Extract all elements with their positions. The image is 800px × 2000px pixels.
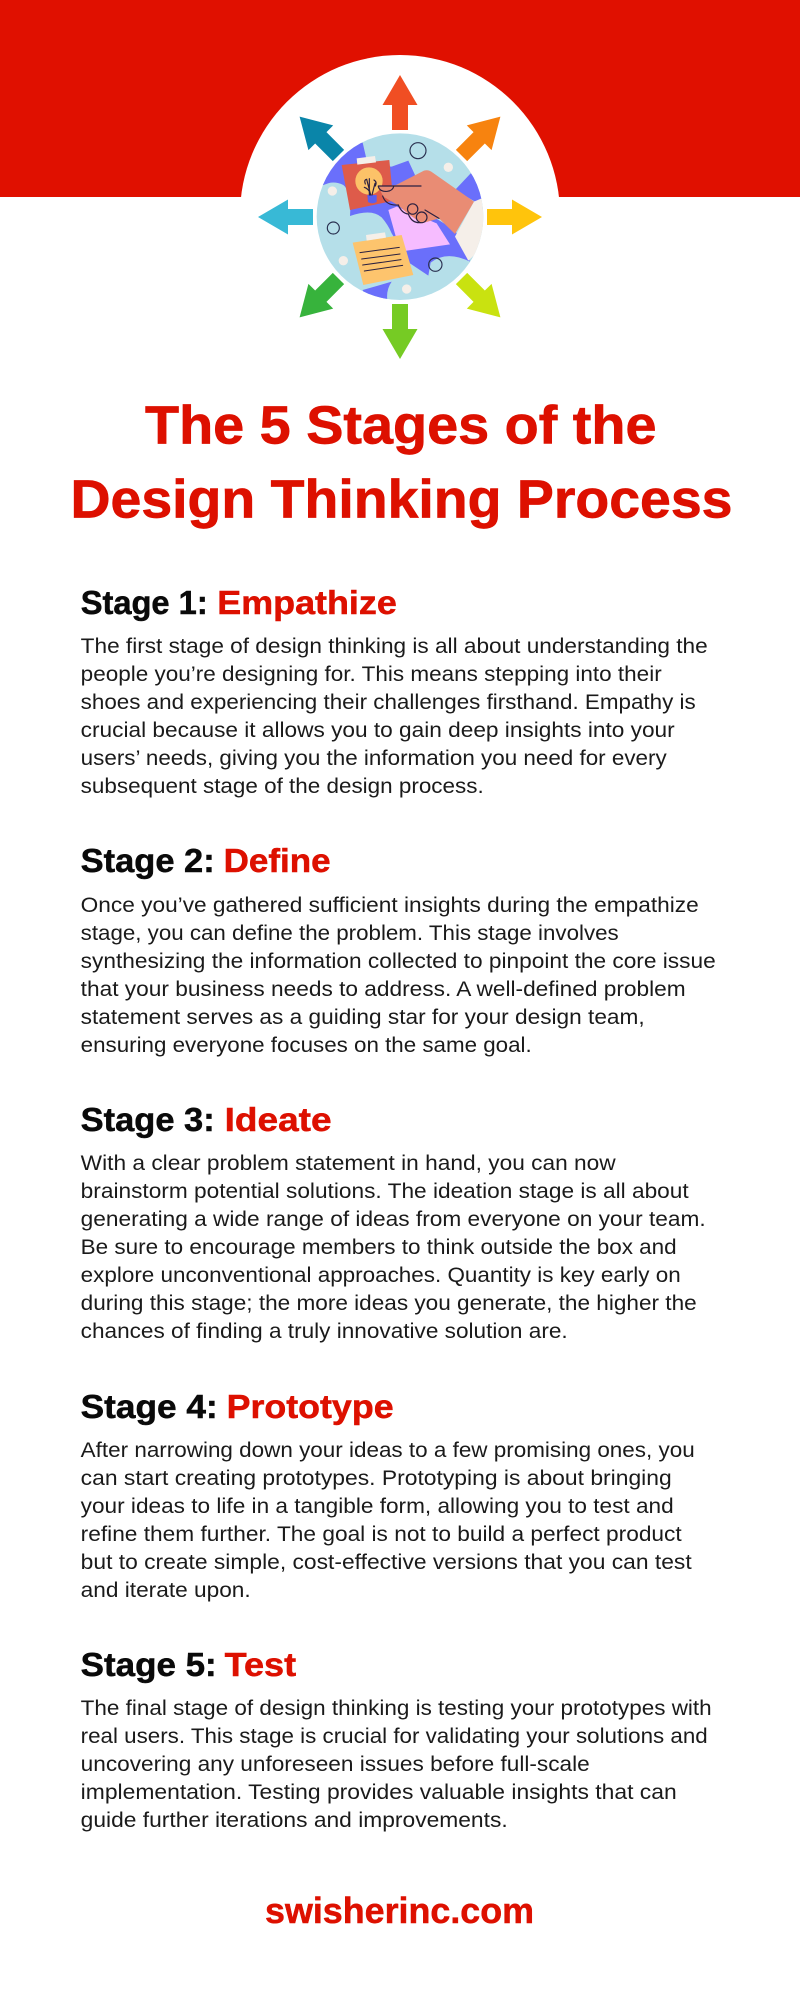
panel: stage 5: [81, 1646, 712, 1832]
text block: stage 2 body: [81, 893, 716, 1057]
arrow: up: [382, 75, 418, 130]
heading: stage 5: Test: [225, 1646, 296, 1683]
heading: stage 3: [81, 1101, 332, 1138]
text block: stage 3 body: during this stage; the more ideas you generate, the higher the: [81, 1291, 697, 1315]
arrow: down: [382, 304, 418, 359]
heading: stage 2: [81, 842, 331, 879]
icon: hand pinning idea notes in a circle: [313, 133, 487, 303]
panel: stage 3: [81, 1101, 706, 1343]
heading: stage 1: [81, 584, 397, 621]
text block: stage 1 body: shoes and experiencing their challenges firsthand. Empathy is: [81, 690, 696, 714]
text block: stage 1 body: users’ needs, giving you the information you need for every: [81, 746, 667, 770]
panel: stage 1: [81, 584, 708, 798]
text block: stage 3 body: generating a wide range of ideas from everyone on your team.: [81, 1207, 706, 1231]
text block: stage 3 body: brainstorm potential solutions. The ideation stage is all about: [81, 1179, 689, 1203]
icon: radial arrows: [258, 75, 542, 359]
heading: stage 4: [81, 1388, 394, 1425]
header: red band with white arch: [0, 0, 800, 375]
arrow: lower right: [449, 266, 513, 330]
text block: stage 2 body: ensuring everyone focuses on the same goal.: [81, 1033, 532, 1057]
text block: stage 2 body: that your business needs to address. A well-defined problem: [81, 977, 686, 1001]
text block: stage 4 body: but to create simple, cost-effective versions that you can test: [81, 1550, 692, 1574]
text block: stage 2 body: stage, you can define the problem. This stage involves: [81, 921, 619, 945]
arrow: lower left: [287, 266, 351, 330]
heading: stage 5: [81, 1646, 296, 1683]
text block: stage 5 body: The final stage of design thinking is testing your prototypes with: [81, 1696, 712, 1720]
text block: stage 3 body: explore unconventional approaches. Quantity is key early on: [81, 1263, 681, 1287]
text block: stage 5 body: guide further iterations and improvements.: [81, 1808, 508, 1832]
panel: stage 4: [81, 1388, 695, 1602]
heading: stage 2: Define: [224, 842, 331, 879]
text block: stage 4 body: After narrowing down your ideas to a few promising ones, you: [81, 1438, 695, 1462]
heading: stage 1: Stage 1:: [81, 584, 208, 621]
text block: stage 1 body: people you’re designing for. This means stepping into their: [81, 662, 662, 686]
text block: stage 1 body: subsequent stage of the design process.: [81, 774, 484, 798]
arrow: upper right: [449, 104, 513, 168]
text block: stage 1 body: crucial because it allows you to gain deep insights into your: [81, 718, 675, 742]
text block: stage 5 body: uncovering any unforeseen issues before full-scale: [81, 1752, 590, 1776]
heading: stage 5: Stage 5:: [81, 1646, 217, 1683]
arrow: upper left: [287, 104, 351, 168]
text block: stage 5 body: [81, 1696, 712, 1832]
heading: stage 1: Empathize: [217, 584, 397, 621]
arrow: left: [258, 200, 313, 234]
text block: stage 4 body: your ideas to life in a tangible form, allowing you to test and: [81, 1494, 674, 1518]
text block: stage 4 body: refine them further. The goal is not to build a perfect product: [81, 1522, 682, 1546]
text block: stage 5 body: implementation. Testing provides valuable insights that can: [81, 1780, 677, 1804]
text block: stage 3 body: chances of finding a truly innovative solution are.: [81, 1319, 568, 1343]
text block: stage 3 body: Be sure to encourage members to think outside the box and: [81, 1235, 677, 1259]
panel: stage 2: [81, 842, 716, 1057]
arrow: right: [487, 200, 542, 234]
text block: stage 2 body: statement serves as a guiding star for your design team,: [81, 1005, 645, 1029]
text block: stage 1 body: [81, 634, 708, 798]
text block: stage 5 body: real users. This stage is crucial for validating your solutions and: [81, 1724, 708, 1748]
title: Design Thinking Process: [70, 470, 732, 530]
heading: stage 3: Stage 3:: [81, 1101, 215, 1138]
footer: website: swisherinc.com: [265, 1890, 534, 1931]
text block: stage 4 body: and iterate upon.: [81, 1578, 251, 1602]
text block: stage 2 body: Once you’ve gathered sufficient insights during the empathize: [81, 893, 699, 917]
text block: stage 1 body: The first stage of design thinking is all about understanding the: [81, 634, 708, 658]
heading: stage 2: Stage 2:: [81, 842, 215, 879]
heading: stage 3: Ideate: [225, 1101, 332, 1138]
title: The 5 Stages of the: [145, 396, 656, 456]
heading: stage 4: Prototype: [227, 1388, 394, 1425]
text block: stage 2 body: synthesizing the information collected to pinpoint the core issue: [81, 949, 716, 973]
title: [70, 396, 732, 530]
text block: stage 3 body: With a clear problem statement in hand, you can now: [81, 1151, 616, 1175]
text block: stage 4 body: can start creating prototypes. Prototyping is about bringing: [81, 1466, 672, 1490]
heading: stage 4: Stage 4:: [81, 1388, 218, 1425]
text block: stage 3 body: [81, 1151, 706, 1343]
text block: stage 4 body: [81, 1438, 695, 1602]
